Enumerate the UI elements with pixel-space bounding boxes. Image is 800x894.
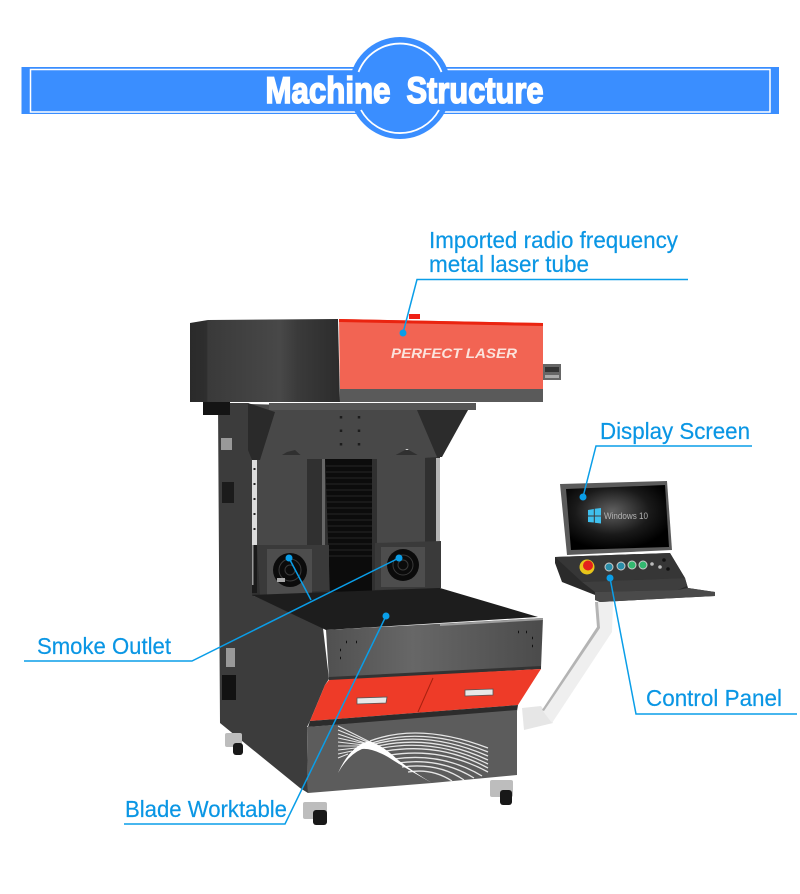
front upper panel xyxy=(326,618,543,681)
caster centre xyxy=(303,802,327,825)
callout: display screen xyxy=(580,418,752,500)
side labels and ports xyxy=(221,438,236,700)
callout: laser tube xyxy=(400,227,688,336)
exhaust vent xyxy=(325,458,372,592)
worktable xyxy=(252,588,538,630)
title text: Machine xyxy=(266,70,390,111)
title text: Structure xyxy=(406,70,544,111)
control console xyxy=(555,481,715,602)
label: metal laser tube xyxy=(429,251,589,277)
label: Imported radio frequency xyxy=(429,227,678,253)
panel body xyxy=(555,553,715,602)
guide rails xyxy=(252,458,440,593)
red drawers xyxy=(308,669,541,727)
label: Smoke Outlet xyxy=(37,633,172,659)
hood xyxy=(248,403,476,460)
side column xyxy=(218,403,329,793)
brand name: PERFECT LASER xyxy=(391,346,517,361)
right fan unit xyxy=(375,541,441,590)
label: Blade Worktable xyxy=(125,796,287,822)
label: Display Screen xyxy=(600,418,750,444)
buttons xyxy=(605,558,670,571)
laser machine xyxy=(190,314,561,825)
monitor xyxy=(560,481,672,555)
callout: control panel xyxy=(606,574,797,714)
callout: blade worktable xyxy=(124,612,390,824)
top housing red cover xyxy=(339,314,561,402)
top housing dark section xyxy=(190,319,340,415)
support arm xyxy=(522,602,613,730)
caster left xyxy=(225,733,243,755)
lower front panel with wave graphic xyxy=(307,710,517,793)
callout: smoke outlet xyxy=(24,554,402,661)
caster right xyxy=(490,780,513,805)
windows logo xyxy=(588,508,601,524)
windows text: Windows 10 xyxy=(604,511,648,522)
title banner xyxy=(22,37,779,139)
title text xyxy=(266,70,544,111)
emergency stop xyxy=(580,560,594,574)
label: Control Panel xyxy=(646,685,782,711)
readout box xyxy=(543,364,561,380)
left fan unit xyxy=(257,545,329,596)
rear interior xyxy=(252,450,440,596)
